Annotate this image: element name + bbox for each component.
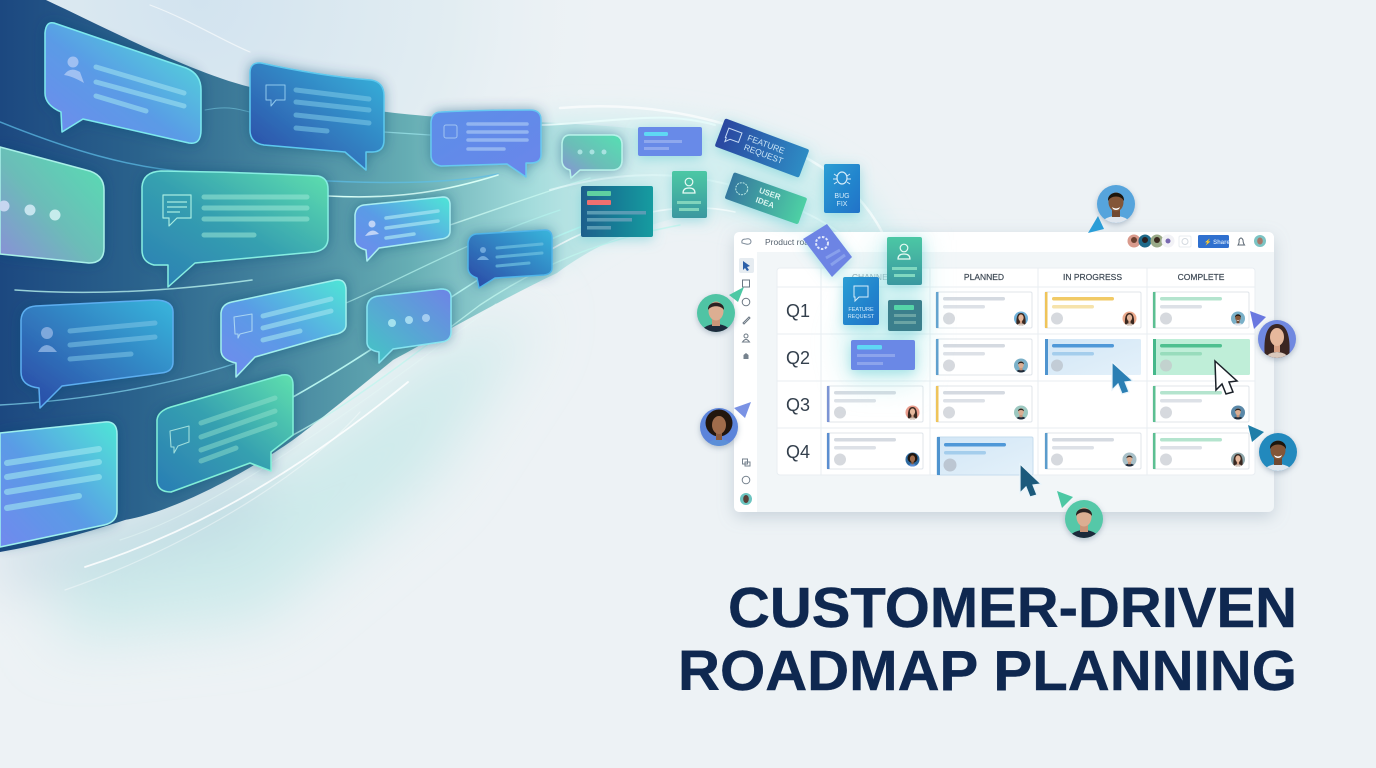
- pale blue light above the wave: [0, 0, 640, 420]
- bubble: blue with chat icon: [431, 110, 541, 177]
- quarter labels: Q2: [786, 348, 810, 368]
- card Q3 planned: [936, 386, 1032, 425]
- cursor: dark teal: [1020, 464, 1041, 497]
- card: idea tilted: [725, 172, 807, 225]
- title: ROADMAP PLANNING: [678, 639, 1297, 703]
- card Q4 planned highlighted: [937, 437, 1033, 475]
- speech bubbles: [0, 23, 622, 547]
- card Q1 in progress: [1045, 292, 1141, 331]
- card: bug report: [824, 164, 860, 213]
- quarter labels: Q3: [786, 395, 810, 415]
- card: dark green list: [888, 300, 922, 331]
- card: feature request tilted: FEATURE: [746, 133, 786, 156]
- avatar: left bottom: [700, 408, 738, 461]
- avatar: right top: [1258, 320, 1296, 372]
- bubble: small with person: [355, 197, 450, 261]
- card: feature request square: FEATURE: [848, 307, 874, 313]
- card Q2 planned: [936, 339, 1032, 378]
- cursor: white: [1215, 361, 1237, 394]
- column headers: IN PROGRESS: [1063, 272, 1122, 282]
- glow around the flowing cards: [530, 117, 908, 370]
- bubble: dots lower: [367, 289, 451, 363]
- board cursors: [1020, 361, 1237, 497]
- card: green person lower: [887, 237, 922, 285]
- card Q4 in progress: [1045, 433, 1141, 472]
- bubble: person lower left: [21, 300, 173, 408]
- card: purple bar: [851, 340, 915, 370]
- bubble: lower center: [221, 280, 346, 377]
- card: feature request square: REQUEST: [848, 314, 875, 320]
- column headers: CHANNELS: [852, 272, 898, 282]
- flowing wave band: [0, 0, 760, 552]
- pointer: right bottom: [1248, 425, 1264, 442]
- avatar: right bottom: [1259, 433, 1297, 486]
- card Q4 channels: [827, 433, 923, 472]
- card: idea tilted: IDEA: [754, 195, 776, 210]
- bubble: green lower: [157, 375, 293, 492]
- glow over the board where cards land: [840, 240, 925, 385]
- card Q3 complete: [1153, 386, 1249, 425]
- bubble: small dark with person: [468, 230, 552, 288]
- task cards: [827, 292, 1250, 475]
- avatar: bottom: [1065, 500, 1103, 552]
- card: feature request tilted: REQUEST: [743, 142, 785, 166]
- pointer: left bottom: [734, 402, 751, 418]
- window body: [734, 232, 1274, 512]
- title: CUSTOMER-DRIVEN: [728, 576, 1297, 640]
- top bar: [734, 232, 1274, 252]
- quarter labels: Q1: [786, 301, 810, 321]
- pointer: top: [1088, 216, 1104, 233]
- cursor: blue: [1112, 362, 1133, 394]
- roadmap board window: [734, 232, 1274, 512]
- top bar: ⚡ Share: [1204, 238, 1230, 246]
- collaborators: [697, 185, 1297, 552]
- card: bug report: BUG: [834, 193, 850, 200]
- bubble: large center: [142, 171, 328, 287]
- card Q2 in progress highlighted: [1045, 339, 1141, 375]
- avatar: left top: [697, 294, 735, 346]
- flow lines: [0, 5, 905, 590]
- card: blue summary: [638, 127, 702, 156]
- left tool sidebar: [734, 252, 757, 512]
- card: purple gear tilted: [803, 224, 852, 277]
- card Q4 complete: [1153, 433, 1249, 472]
- quarter labels: Q4: [786, 442, 810, 462]
- top bar: Product roadmap: [765, 237, 830, 247]
- bubble: bottom left: [0, 422, 117, 547]
- card Q2 complete highlighted: [1153, 339, 1250, 375]
- card: feature request square: [843, 277, 879, 325]
- kanban grid: [777, 268, 1255, 475]
- quarter labels: [786, 301, 810, 462]
- bubble: large with dots: [0, 147, 104, 263]
- column headers: PLANNED: [964, 272, 1004, 282]
- card Q1 complete: [1153, 292, 1249, 331]
- card: green person: [672, 171, 707, 218]
- bubble: small dots center: [562, 135, 622, 178]
- pointer: bottom: [1057, 491, 1073, 508]
- card: bug report: FIX: [837, 201, 848, 208]
- flying feature cards: [581, 118, 922, 370]
- card Q3 channels: [827, 386, 923, 425]
- title: [678, 576, 1297, 703]
- bubble: top left with person: [45, 23, 201, 143]
- bubble: dark with chat icon: [250, 63, 384, 170]
- card Q1 planned: [936, 292, 1032, 331]
- pointer: left top: [729, 287, 744, 302]
- column headers: [852, 272, 1225, 282]
- column headers: COMPLETE: [1178, 272, 1225, 282]
- card: teal list: [581, 186, 653, 237]
- pointer: right top: [1250, 311, 1266, 329]
- card: feature request tilted: [715, 118, 809, 178]
- card: idea tilted: USER: [758, 186, 782, 202]
- soft teal glow below the wave: [0, 310, 540, 640]
- avatar: top: [1097, 185, 1135, 238]
